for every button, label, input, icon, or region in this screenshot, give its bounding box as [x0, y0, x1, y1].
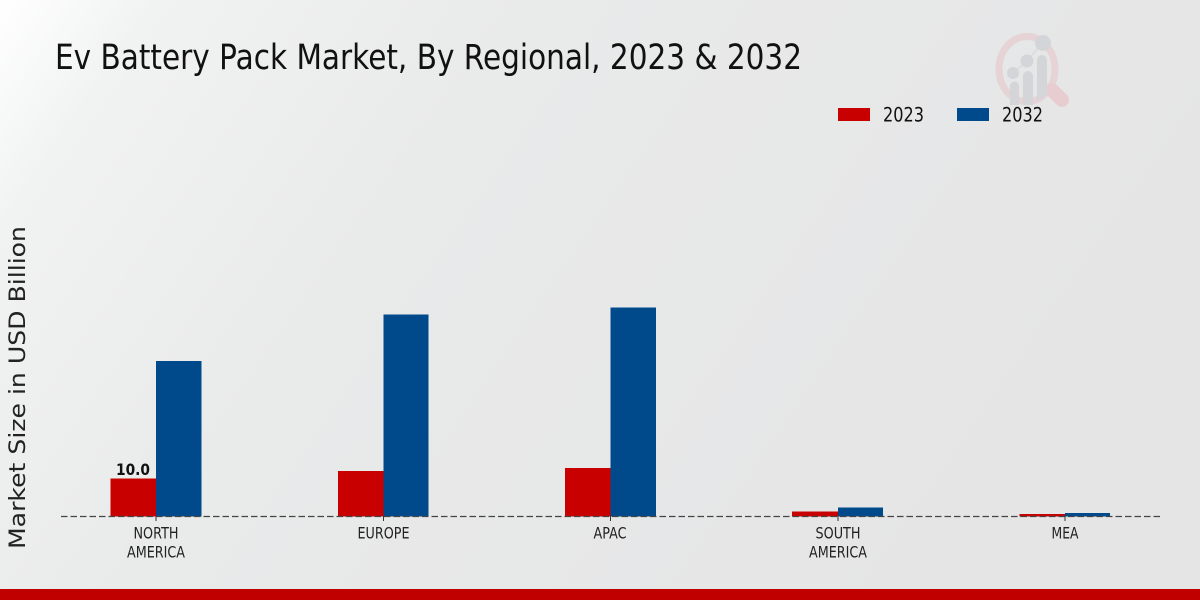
category label: South America: SOUTH: [816, 524, 860, 542]
legend item: 2023: [838, 104, 924, 126]
bars: MEA: [1020, 513, 1110, 516]
legend item: 2023: 2023: [883, 104, 924, 126]
bar chart: [61, 308, 1160, 562]
category label: North America: AMERICA: [127, 542, 185, 562]
footer bar: [0, 589, 1200, 600]
category label: South America: AMERICA: [809, 542, 867, 562]
axis baseline: [61, 516, 1160, 518]
y-axis label: Market Size in USD Billion: [5, 226, 31, 549]
bars: North America: [110, 361, 202, 516]
icon: logo watermark: [999, 35, 1062, 105]
bars: South America: [792, 508, 883, 516]
legend item: 2032: 2032: [1002, 104, 1043, 126]
title: Ev Battery Pack Market, By Regional, 2023 & 2032: [55, 38, 802, 78]
category label: North America: NORTH: [134, 524, 178, 542]
bars: Europe: [338, 314, 428, 516]
bars: APAC: [565, 308, 656, 516]
category label: APAC: APAC: [594, 524, 626, 542]
data label: 10.0: 10.0: [116, 460, 150, 479]
category label: MEA: MEA: [1052, 524, 1079, 542]
legend: [838, 104, 1043, 126]
category label: Europe: EUROPE: [358, 524, 410, 542]
legend item: 2032: [957, 104, 1043, 126]
